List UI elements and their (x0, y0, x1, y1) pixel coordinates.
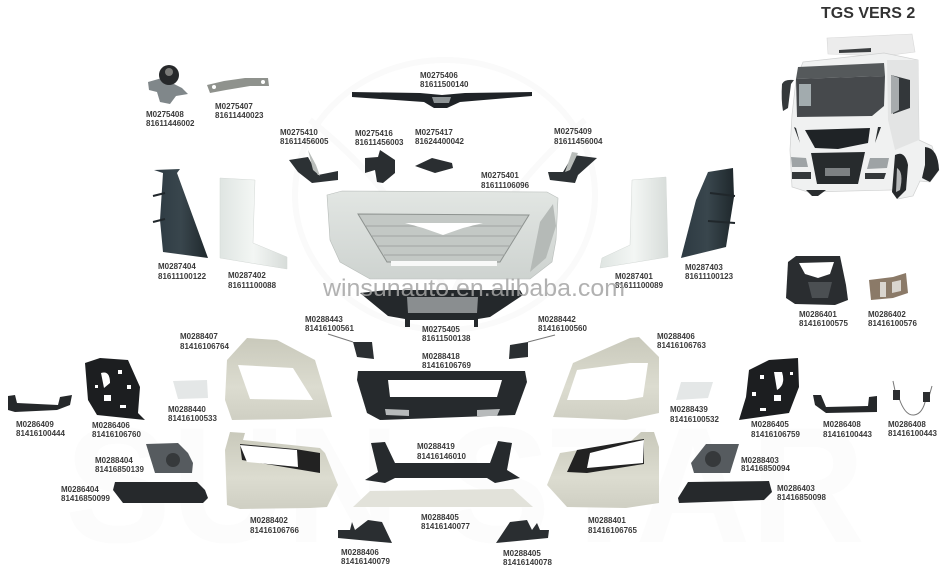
part M0275407 (207, 78, 269, 120)
part M0286405 right bracket: M0286405 (751, 420, 789, 429)
part M0275407: M0275407 (215, 102, 253, 111)
grille (805, 128, 870, 149)
part M0286404: 81416850099 (61, 494, 110, 503)
part M0275401 main grille panel (327, 171, 558, 279)
part M0287403 (681, 168, 735, 281)
part M0275417: 81624400042 (415, 137, 464, 146)
cab side shading (887, 60, 919, 150)
part M0286403: 81416850098 (777, 493, 826, 502)
truck photo (782, 34, 939, 199)
part M0288419 (365, 441, 520, 483)
part M0288406 right headlight bezel: 81416106763 (657, 341, 706, 350)
part M0287404 (153, 169, 208, 281)
part M0288403: M0288403 (741, 456, 779, 465)
part M0287401: M0287401 (615, 272, 653, 281)
part M0286405 right bracket: 81416106759 (751, 430, 800, 439)
part M0275410: M0275410 (280, 128, 318, 137)
part M0286404 (61, 482, 208, 503)
part M0286402: 81416100576 (868, 319, 917, 328)
part M0288407 left headlight bezel: 81416106764 (180, 342, 229, 351)
part M0288442: 81416100560 (538, 324, 587, 333)
part M0275416 (355, 129, 404, 183)
cab body (790, 53, 939, 199)
part M0286405 right bracket (739, 358, 800, 439)
part M0288405 skid plate: 81416140077 (421, 522, 470, 531)
part M0288405 skid plate: M0288405 (421, 513, 459, 522)
part M0288407 left headlight bezel (180, 332, 332, 420)
part M0287401 (600, 177, 668, 290)
part M0275405 lower grille: 81611500138 (422, 334, 471, 343)
part M0275401 main grille panel: M0275401 (481, 171, 519, 180)
part M0275408: M0275408 (146, 110, 184, 119)
part M0275405 lower grille (360, 290, 523, 343)
alibaba watermark: winsunauto.en.alibaba.com (322, 275, 625, 302)
part M0286401 (786, 256, 848, 328)
part M0286408 bracket: 81416100443 (823, 430, 872, 439)
part M0287403: M0287403 (685, 263, 723, 272)
part M0286408 spring (888, 381, 937, 438)
part M0275416: M0275416 (355, 129, 393, 138)
part M0287404: 81611100122 (158, 272, 207, 281)
part M0275410 (280, 128, 338, 183)
part M0275406 top bar: 81611500140 (420, 80, 469, 89)
faint background logo watermark (295, 60, 595, 330)
part M0288442 (509, 315, 587, 359)
part M0288418 bumper centre: M0288418 (422, 352, 460, 361)
side window (891, 75, 910, 114)
part M0288443: 81416100561 (305, 324, 354, 333)
part M0286402: M0286402 (868, 310, 906, 319)
part M0288443 (305, 315, 374, 359)
part M0288405 skid plate (353, 489, 533, 531)
part M0275410: 81611456005 (280, 137, 329, 146)
part M0288404 (95, 443, 193, 474)
part M0288406 lower left (338, 520, 392, 566)
part M0287403: 81611100123 (685, 272, 734, 281)
part M0288404: M0288404 (95, 456, 133, 465)
part M0275405 lower grille: M0275405 (422, 325, 460, 334)
part M0275417: M0275417 (415, 128, 453, 137)
part M0288401 right lower corner (547, 432, 659, 535)
wing emblem (405, 223, 483, 235)
part M0286406 left bracket (85, 358, 145, 439)
part M0275417 (415, 128, 464, 173)
part M0287401: 81611100089 (615, 281, 664, 290)
part M0286402 (868, 273, 917, 328)
part M0275406 top bar (352, 71, 532, 108)
part M0288406 right headlight bezel: M0288406 (657, 332, 695, 341)
part M0286408 bracket (813, 395, 877, 439)
part M0275409: 81611456004 (554, 137, 603, 146)
part M0288418 bumper centre: 81416106769 (422, 361, 471, 370)
part M0288402 left lower corner: M0288402 (250, 516, 288, 525)
part M0275409 (548, 127, 603, 183)
part M0288404: 81416850139 (95, 465, 144, 474)
part M0286409 (8, 395, 72, 438)
grille inset (358, 214, 529, 262)
windscreen (796, 76, 885, 117)
part M0288405 lower right (496, 520, 552, 567)
part M0275407: 81611440023 (215, 111, 264, 120)
part M0286401: 81416100575 (799, 319, 848, 328)
part M0288440: 81416100533 (168, 414, 217, 423)
part M0286406 left bracket: 81416106760 (92, 430, 141, 439)
roof spoiler (827, 34, 915, 56)
part M0288407 left headlight bezel: M0288407 (180, 332, 218, 341)
part M0286409: 81416100444 (16, 429, 65, 438)
part M0288402 left lower corner (225, 432, 338, 535)
part M0288439: 81416100532 (670, 415, 719, 424)
part M0288439: M0288439 (670, 405, 708, 414)
headlights (791, 157, 808, 167)
sun visor (796, 63, 885, 79)
part M0275408 (146, 65, 195, 128)
part M0288443: M0288443 (305, 315, 343, 324)
part M0288440 (168, 380, 217, 423)
part M0288419: M0288419 (417, 442, 455, 451)
part M0286403: M0286403 (777, 484, 815, 493)
part M0275401 main grille panel: 81611106096 (481, 181, 530, 190)
part M0286406 left bracket: M0286406 (92, 421, 130, 430)
part M0286408 bracket: M0286408 (823, 420, 861, 429)
part M0288419: 81416146010 (417, 452, 466, 461)
part M0286403 (678, 481, 826, 503)
part M0286401: M0286401 (799, 310, 837, 319)
part M0275406 top bar: M0275406 (420, 71, 458, 80)
part M0287402: M0287402 (228, 271, 266, 280)
part M0288406 lower left: 81416140079 (341, 557, 390, 566)
title: TGS VERS 2 (821, 5, 915, 22)
part M0288406 lower left: M0288406 (341, 548, 379, 557)
part M0288403 (691, 444, 790, 473)
part M0286404: M0286404 (61, 485, 99, 494)
part M0287402: 81611100088 (228, 281, 277, 290)
part M0288402 left lower corner: 81416106766 (250, 526, 299, 535)
left mirror (782, 80, 794, 111)
part M0286409: M0286409 (16, 420, 54, 429)
part M0288440: M0288440 (168, 405, 206, 414)
part M0286408 spring: M0286408 (888, 420, 926, 429)
part M0288406 right headlight bezel (553, 332, 706, 420)
part M0275409: M0275409 (554, 127, 592, 136)
part M0275416: 81611456003 (355, 138, 404, 147)
part M0287402 (220, 178, 287, 290)
part M0286408 spring: 81416100443 (888, 429, 937, 438)
part M0287404: M0287404 (158, 262, 196, 271)
part M0288439 (670, 382, 719, 424)
part M0288403: 81416850094 (741, 464, 790, 473)
part M0288401 right lower corner: M0288401 (588, 516, 626, 525)
part M0288405 lower right: 81416140078 (503, 558, 552, 567)
part M0275408: 81611446002 (146, 119, 195, 128)
part M0288418 bumper centre (357, 352, 527, 420)
part M0288405 lower right: M0288405 (503, 549, 541, 558)
part M0288401 right lower corner: 81416106765 (588, 526, 637, 535)
part M0288442: M0288442 (538, 315, 576, 324)
wheels (892, 154, 908, 199)
lower bumper (811, 152, 865, 184)
